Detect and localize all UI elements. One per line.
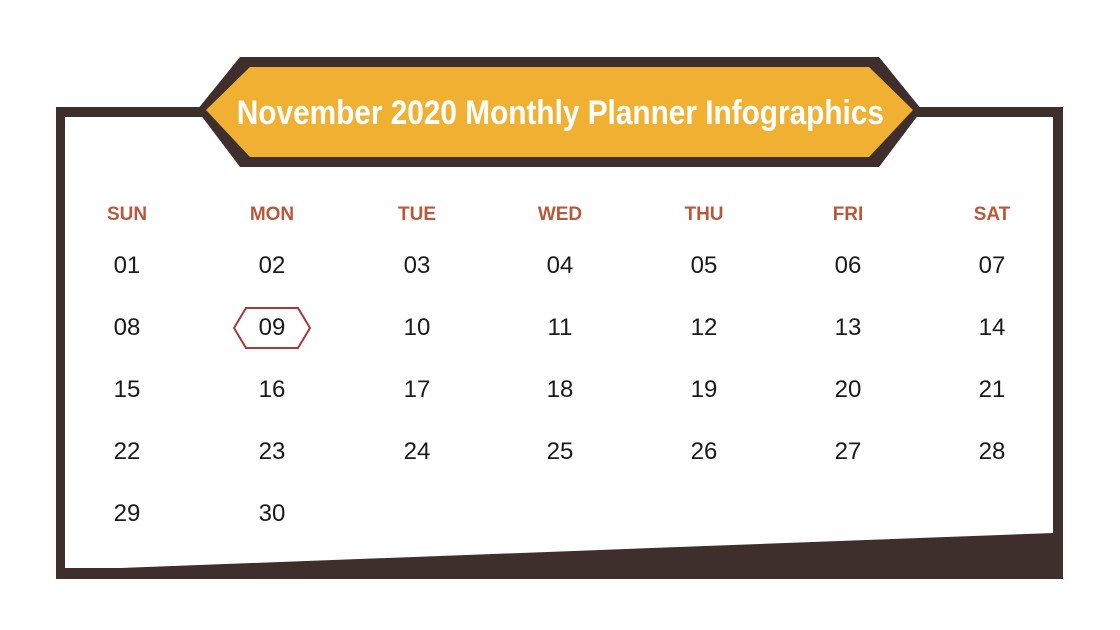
weekday headers (107, 204, 1010, 225)
title banner (200, 57, 920, 167)
date grid: 15 (114, 376, 140, 403)
date grid: 10 (404, 314, 430, 341)
weekday headers: FRI (833, 204, 863, 225)
date grid: 13 (835, 314, 861, 341)
date grid: 29 (114, 500, 140, 527)
highlight: day 09 hexagon (232, 307, 312, 349)
date grid: 09 (259, 314, 285, 341)
date grid: 19 (691, 376, 717, 403)
weekday headers: WED (538, 204, 582, 225)
date grid: 21 (979, 376, 1005, 403)
date grid: 24 (404, 438, 430, 465)
date grid: 12 (691, 314, 717, 341)
date grid: 11 (548, 314, 572, 341)
date grid: 06 (835, 252, 861, 279)
date grid: 25 (547, 438, 573, 465)
date grid: 26 (691, 438, 717, 465)
date grid: 17 (404, 376, 430, 403)
date grid: 23 (259, 438, 285, 465)
date grid: 18 (547, 376, 573, 403)
date grid: 27 (835, 438, 861, 465)
date grid: 01 (114, 252, 140, 279)
date grid: 22 (114, 438, 140, 465)
date grid: 04 (547, 252, 573, 279)
title text: November 2020 Monthly Planner Infographics (236, 94, 884, 132)
date grid: 20 (835, 376, 861, 403)
date grid: 14 (979, 314, 1005, 341)
date grid: 08 (114, 314, 140, 341)
weekday headers: SUN (107, 204, 147, 225)
date grid: 30 (259, 500, 285, 527)
date grid: 07 (979, 252, 1005, 279)
date grid: 03 (404, 252, 430, 279)
date grid: 16 (259, 376, 285, 403)
date grid (114, 252, 1005, 527)
date grid: 05 (691, 252, 717, 279)
weekday headers: MON (250, 204, 294, 225)
weekday headers: THU (684, 204, 724, 225)
date grid: 02 (259, 252, 285, 279)
weekday headers: TUE (398, 204, 436, 225)
date grid: 28 (979, 438, 1005, 465)
weekday headers: SAT (974, 204, 1010, 225)
